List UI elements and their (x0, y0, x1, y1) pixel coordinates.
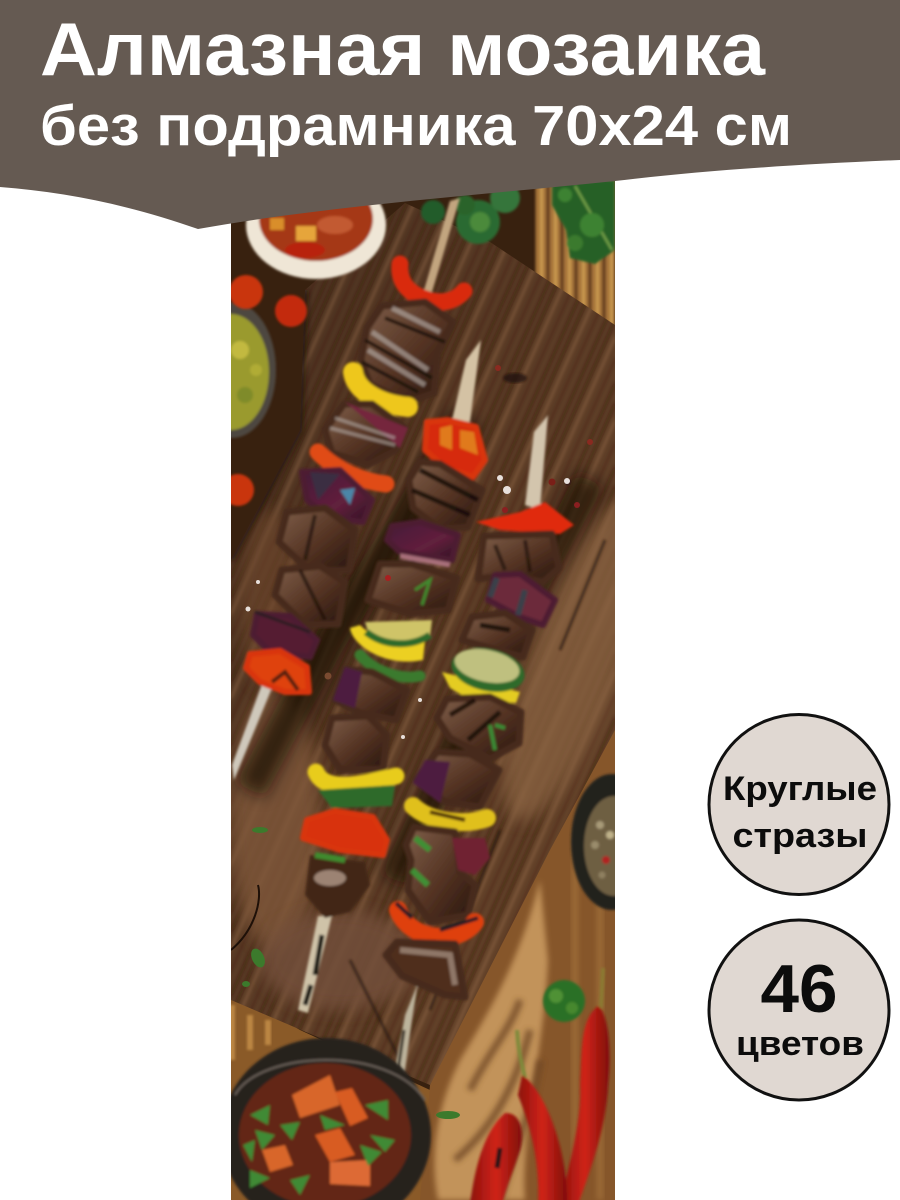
yellow pepper (413, 806, 487, 822)
skewer 1 (232, 198, 464, 780)
red pepper (476, 502, 574, 534)
zucchini (442, 672, 520, 703)
meat (437, 697, 521, 759)
title: Алмазная мозаика (40, 7, 766, 91)
skewer 2 (298, 340, 485, 1013)
meat (368, 564, 457, 614)
skewer 1 stick (424, 198, 460, 292)
badge: 46 colours (709, 920, 889, 1100)
meat (406, 827, 475, 922)
herb sprigs on board (242, 827, 460, 1119)
bowl of peppercorns at right (571, 774, 653, 910)
yellow pepper and zucchini (316, 772, 396, 785)
blades (525, 415, 548, 510)
banner: header background (0, 0, 900, 229)
bowl: red salsa at top (244, 204, 388, 281)
yellow pepper (353, 372, 408, 407)
bowl: green relish at left (231, 302, 277, 439)
orange pepper (318, 452, 386, 484)
red pepper lower (246, 651, 309, 692)
meat (478, 534, 559, 582)
parsley at top (421, 180, 615, 264)
red onion (488, 574, 555, 625)
onion and meat (416, 752, 499, 807)
meat (462, 613, 532, 657)
badge: 46 colours: цветов (736, 1025, 864, 1063)
badge: round rhinestones (709, 714, 889, 894)
purple onion (302, 470, 372, 522)
red pepper (398, 910, 475, 937)
badge: round rhinestones: стразы (732, 817, 868, 855)
skewer 3 (386, 415, 574, 1102)
onion (387, 522, 458, 560)
panel: product picture of grilled skewers (231, 181, 615, 1200)
meat with onion edge (325, 404, 405, 465)
parsley sprig and chili peppers (470, 968, 610, 1200)
badge: 46 colours: 46 (760, 951, 838, 1027)
onion and meat (335, 669, 407, 720)
bowl of salsa at bottom left (221, 1038, 431, 1200)
blades (452, 340, 481, 422)
meat chunks (279, 508, 355, 571)
badge: round rhinestones: Круглые (723, 770, 877, 808)
wooden table background (231, 170, 615, 1200)
red pepper (400, 264, 464, 302)
pepper (425, 420, 485, 477)
cherry tomatoes (222, 275, 307, 506)
bottom meat (305, 855, 370, 918)
onion lower (253, 614, 317, 657)
zucchini and squash (350, 625, 425, 662)
salt and peppercorns (246, 365, 593, 739)
meat top (361, 302, 453, 402)
red pepper (303, 811, 387, 855)
bottom meat (386, 942, 465, 997)
subtitle: без подрамника 70х24 см (40, 94, 792, 158)
wooden cutting board (231, 203, 615, 1085)
meat (409, 462, 482, 529)
